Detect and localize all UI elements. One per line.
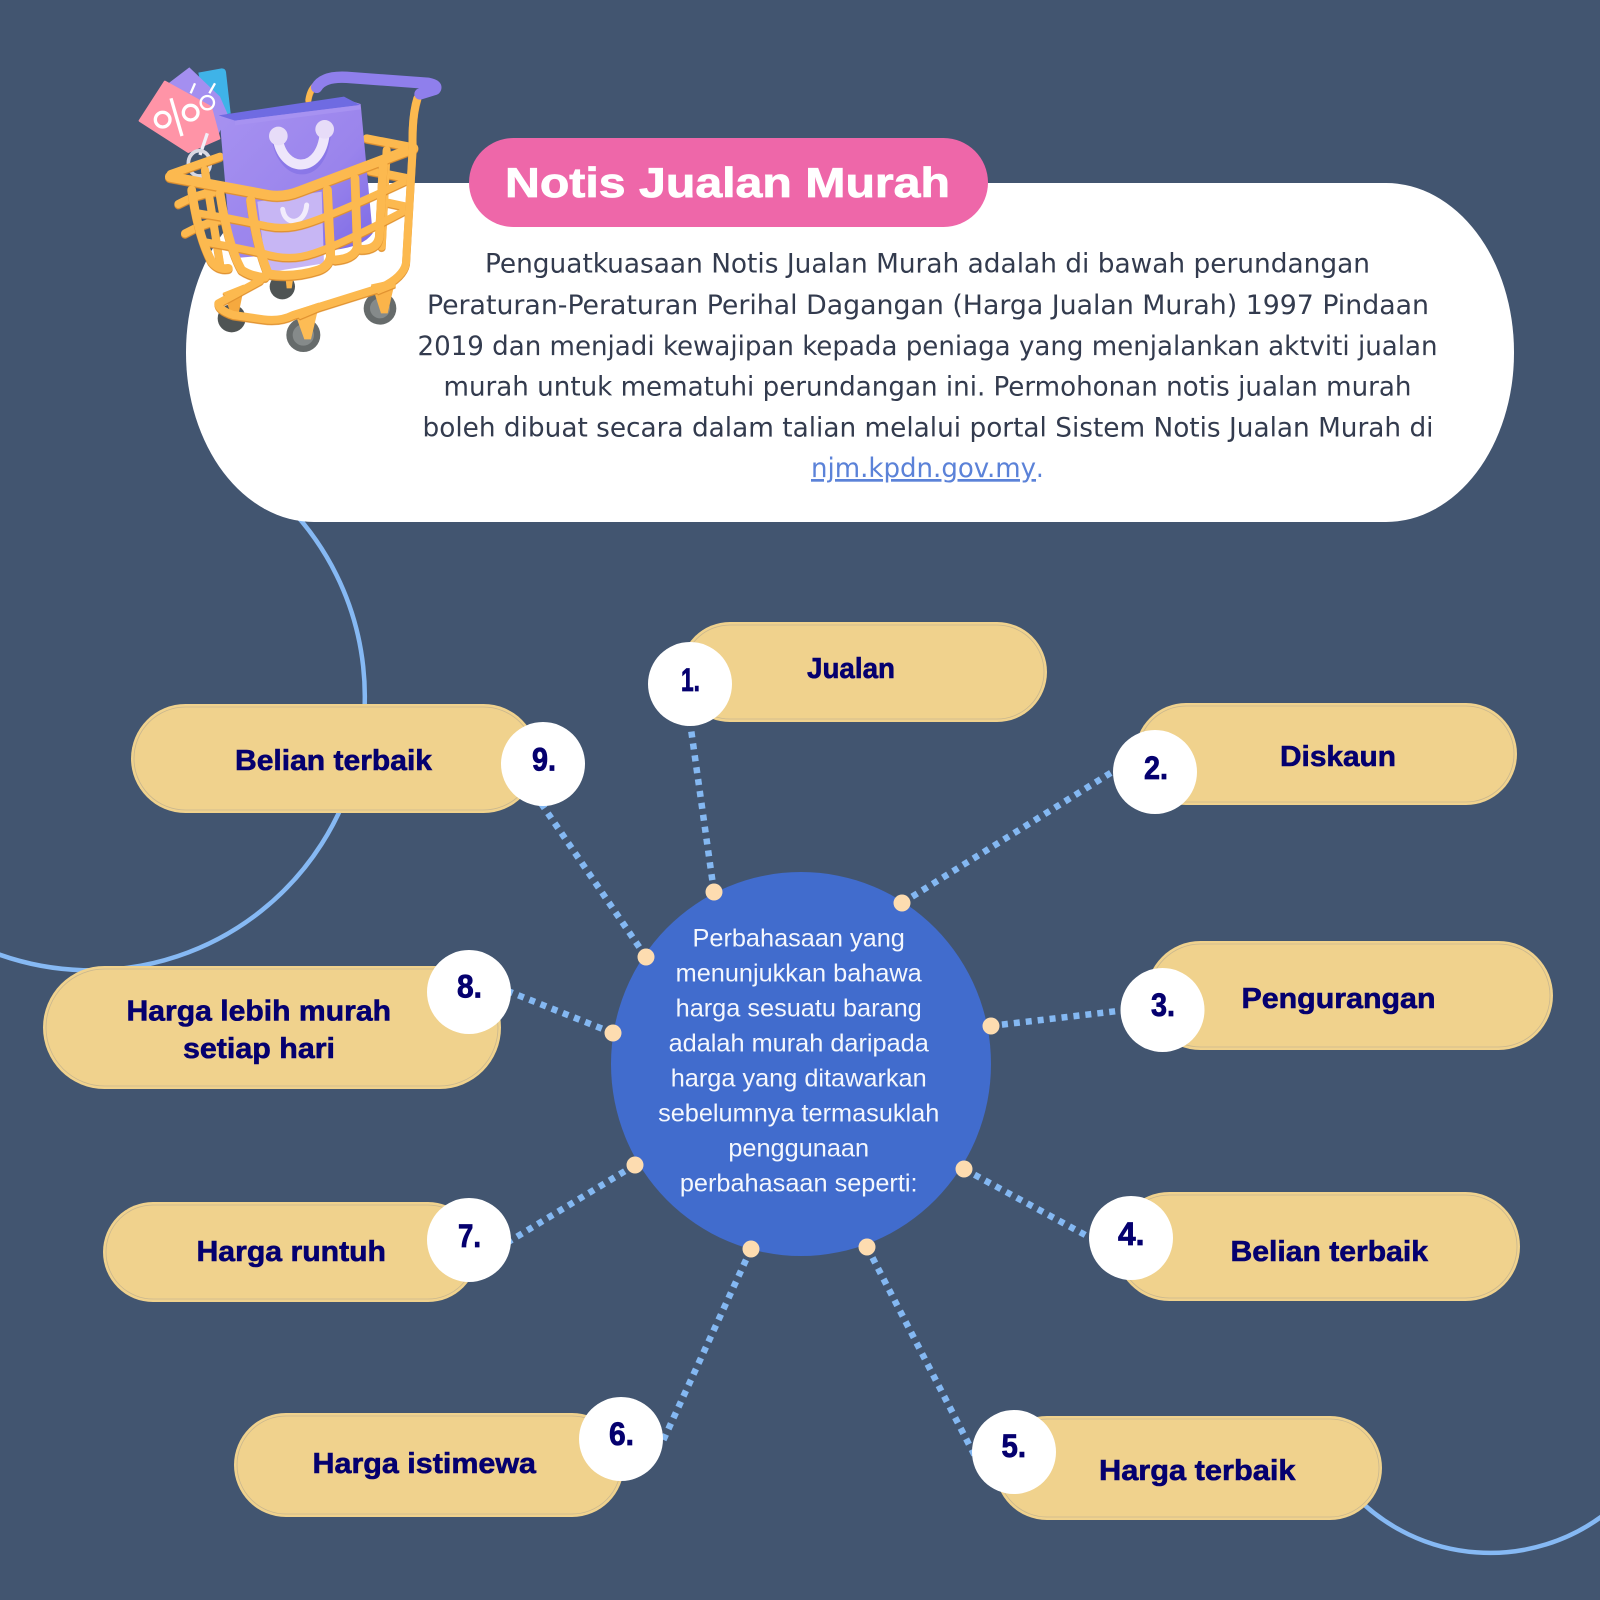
- intro paragraph: [418, 248, 1438, 484]
- item 3: Pengurangan: 3.: [1151, 987, 1175, 1023]
- item 9: Belian terbaik: Belian terbaik: [235, 745, 433, 777]
- item 4: Belian terbaik: [1089, 1192, 1520, 1301]
- item 3: Pengurangan: Pengurangan: [1242, 983, 1436, 1015]
- definition text: penggunaan: [728, 1135, 869, 1163]
- icon: shopping cart: [140, 67, 436, 352]
- definition text: sebelumnya termasuklah: [658, 1100, 939, 1128]
- back of basket: [171, 83, 413, 263]
- item 7: Harga runtuh: Harga runtuh: [196, 1236, 386, 1268]
- definition text: menunjukkan bahawa: [676, 960, 923, 988]
- central circle with definition text: [611, 872, 991, 1256]
- definition text: harga sesuatu barang: [676, 995, 922, 1023]
- item 7: Harga runtuh: [103, 1198, 511, 1302]
- cart handle: [317, 77, 436, 94]
- panel: intro: [186, 183, 1514, 522]
- intro paragraph: njm.kpdn.gov.my: [811, 453, 1036, 484]
- item 1: Jualan: [648, 622, 1047, 726]
- item 6: Harga istimewa: Harga istimewa: [312, 1448, 537, 1480]
- title pill: Notis Jualan Murah: [505, 159, 950, 206]
- cart wheels: [218, 273, 396, 352]
- decorative arc: large circle left: [0, 502, 365, 970]
- connector lines: [490, 715, 1135, 1458]
- definition text: Perbahasaan yang: [693, 925, 905, 953]
- item 8: Harga lebih murah setiap hari: setiap hari: [183, 1033, 335, 1065]
- shopping bag: [219, 97, 373, 273]
- item 2: Diskaun: [1113, 703, 1517, 814]
- item 9: Belian terbaik: 9.: [532, 742, 556, 778]
- item 1: Jualan: Jualan: [807, 653, 895, 685]
- definition text: adalah murah daripada: [669, 1030, 930, 1058]
- item 8: Harga lebih murah setiap hari: [43, 950, 511, 1089]
- item 8: Harga lebih murah setiap hari: Harga lebih murah: [126, 996, 391, 1028]
- intro paragraph: .: [1036, 453, 1044, 484]
- intro paragraph: Penguatkuasaan Notis Jualan Murah adalah di bawah perundangan: [485, 248, 1370, 280]
- item 4: Belian terbaik: 4.: [1118, 1216, 1144, 1252]
- definition text: perbahasaan seperti:: [680, 1170, 918, 1198]
- title pill: [469, 138, 988, 227]
- item 9: Belian terbaik: [131, 704, 585, 813]
- item 8: Harga lebih murah setiap hari: 8.: [457, 968, 482, 1004]
- item 2: Diskaun: 2.: [1144, 750, 1168, 786]
- item 6: Harga istimewa: 6.: [609, 1416, 634, 1452]
- item 4: Belian terbaik: Belian terbaik: [1230, 1236, 1429, 1268]
- front of basket: [170, 148, 413, 277]
- item 3: Pengurangan: [1120, 941, 1553, 1052]
- cart frame and base: [218, 98, 417, 320]
- intro paragraph: murah untuk mematuhi perundangan ini. Permohonan notis jualan murah: [444, 372, 1412, 402]
- connector end dots: [604, 884, 1000, 1258]
- item 5: Harga terbaik: Harga terbaik: [1099, 1455, 1296, 1487]
- item 1: Jualan: 1.: [681, 662, 700, 698]
- intro paragraph: 2019 dan menjadi kewajipan kepada peniaga yang menjalankan aktviti jualan: [418, 331, 1438, 362]
- item 6: Harga istimewa: [234, 1397, 663, 1517]
- item 2: Diskaun: Diskaun: [1280, 741, 1396, 773]
- item 5: Harga terbaik: [972, 1410, 1382, 1520]
- definition text: harga yang ditawarkan: [671, 1065, 927, 1093]
- intro paragraph: Peraturan-Peraturan Perihal Dagangan (Harga Jualan Murah) 1997 Pindaan: [427, 290, 1429, 321]
- intro paragraph: boleh dibuat secara dalam talian melalui portal Sistem Notis Jualan Murah di: [422, 412, 1434, 444]
- decorative arc: bottom right: [1355, 1496, 1600, 1553]
- item 5: Harga terbaik: 5.: [1002, 1428, 1026, 1464]
- item 7: Harga runtuh: 7.: [458, 1218, 481, 1254]
- price tags: [140, 67, 231, 176]
- definition text: [658, 925, 939, 1198]
